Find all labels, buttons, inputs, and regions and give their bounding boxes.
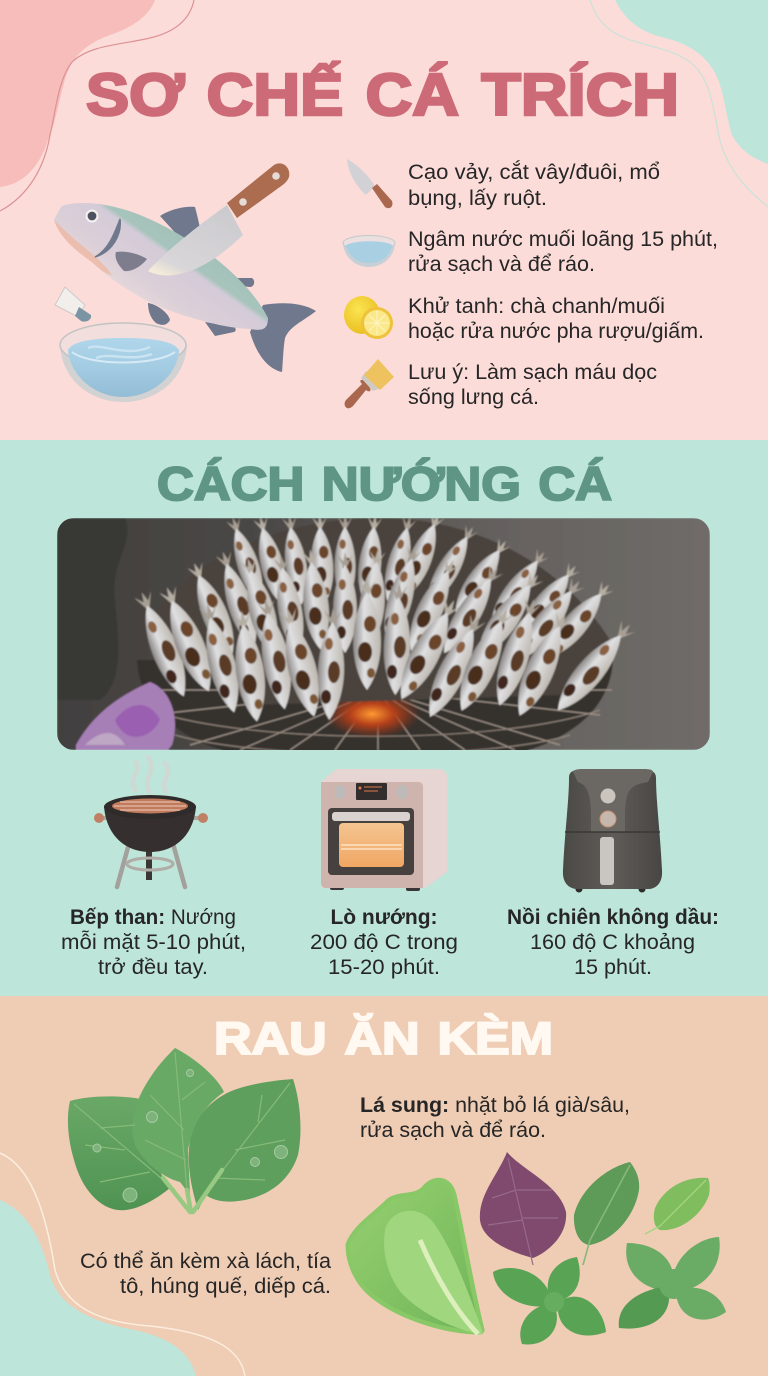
method text: [507, 906, 719, 979]
leaf veins: [74, 1052, 290, 1205]
icon: oven: [321, 769, 447, 891]
method text: 160 độ C khoảng: [530, 931, 695, 954]
illustration: small green leaf: [645, 1178, 710, 1234]
method text: 15-20 phút.: [328, 956, 440, 979]
icon: brush: [345, 359, 394, 408]
step text: bụng, lấy ruột.: [408, 187, 547, 210]
step 2: bowl icon and text: [343, 228, 718, 276]
step text: Lưu ý: Làm sạch máu dọc: [408, 361, 657, 384]
illustration: large green leaf: [574, 1162, 639, 1265]
step text: [408, 361, 657, 409]
photo: grilled herring on wire rack: [57, 518, 710, 750]
glass bowl with water: [60, 323, 187, 402]
text: fig leaf preparation: Lá sung: nhặt bỏ lá già/sâu,: [360, 1094, 630, 1117]
step text: [408, 228, 718, 276]
text: fig leaf preparation: rửa sạch và để ráo.: [360, 1119, 546, 1142]
decorative blob: top left: [0, 0, 155, 187]
method text: [61, 906, 246, 979]
step 1: knife icon and text: [347, 159, 660, 210]
illustration: lettuce: [350, 1182, 480, 1334]
icon: lemon: [344, 296, 393, 339]
fish pectoral fin: [115, 252, 147, 271]
wire rack: [137, 660, 614, 750]
step text: [408, 161, 660, 210]
purple plastic bag: [76, 682, 175, 750]
step text: Cạo vảy, cắt vây/đuôi, mổ: [408, 161, 660, 184]
knife blade: [148, 205, 243, 275]
fish gill: [95, 219, 120, 257]
method text: Lò nướng:: [330, 906, 438, 929]
illustration: basil: [493, 1257, 606, 1344]
method text: mỗi mặt 5-10 phút,: [61, 931, 246, 954]
illustration: mint: [619, 1237, 726, 1329]
fish eye: [86, 210, 98, 222]
icon: charcoal grill with steam: [94, 757, 208, 887]
method text: trở đều tay.: [98, 956, 208, 979]
front row fish: [134, 592, 186, 698]
fish underlay: [234, 518, 610, 705]
heading: RAU ĂN KÈM: RAU ĂN KÈM: [214, 1013, 553, 1064]
step text: Khử tanh: chà chanh/muối: [408, 295, 665, 318]
middle leaf: [132, 1048, 224, 1195]
icon: water bowl: [343, 236, 395, 267]
step 3: lemon icon and text: [344, 295, 704, 343]
method text: Nồi chiên không dầu:: [507, 906, 719, 929]
heading: CÁCH NƯỚNG CÁ: CÁCH NƯỚNG CÁ: [157, 457, 612, 510]
decorative blob: bottom left: [0, 1200, 196, 1376]
method text: [310, 906, 458, 979]
method text: 200 độ C trong: [310, 931, 458, 954]
fish body: [54, 203, 268, 330]
leaf stems: [163, 1170, 222, 1212]
back row fish: [188, 562, 235, 654]
method text: 15 phút.: [574, 956, 652, 979]
top row fish: [226, 518, 264, 588]
text: fig leaf preparation: [360, 1094, 630, 1142]
illustration: purple perilla leaf: [480, 1152, 566, 1265]
icon: knife: [347, 159, 392, 208]
left leaf: [68, 1096, 170, 1210]
text: other herbs: tô, húng quế, diếp cá.: [120, 1275, 331, 1298]
text: other herbs: Có thể ăn kèm xà lách, tía: [80, 1250, 331, 1273]
step text: [408, 295, 704, 343]
salt shaker: [55, 287, 91, 322]
grill method: [61, 757, 246, 979]
knife handle: [227, 163, 289, 218]
section: grilling methods: [0, 440, 768, 996]
text: other herbs: [80, 1250, 331, 1298]
right leaf: [189, 1079, 300, 1210]
section: side vegetables: [0, 996, 768, 1376]
step 4: brush icon and text: [345, 359, 657, 409]
step text: rửa sạch và để ráo.: [408, 253, 595, 276]
air fryer method: [507, 769, 719, 979]
illustration: three fig leaves: [68, 1048, 300, 1212]
title: SƠ CHẾ CÁ TRÍCH: SƠ CHẾ CÁ TRÍCH: [86, 62, 679, 128]
charcoal glow: [328, 700, 418, 737]
step text: Ngâm nước muối loãng 15 phút,: [408, 228, 718, 251]
step text: sống lưng cá.: [408, 386, 539, 409]
fish fins: [148, 207, 316, 372]
illustration: fish, knife, salt and bowl: [54, 163, 316, 402]
water drops: [93, 1070, 288, 1202]
oven method: [310, 769, 458, 979]
step text: hoặc rửa nước pha rượu/giấm.: [408, 320, 704, 343]
decorative blob: top right: [615, 0, 768, 164]
section: preparing herring: [0, 0, 768, 440]
icon: air fryer: [563, 769, 662, 892]
method text: Bếp than: Nướng: [70, 906, 236, 929]
